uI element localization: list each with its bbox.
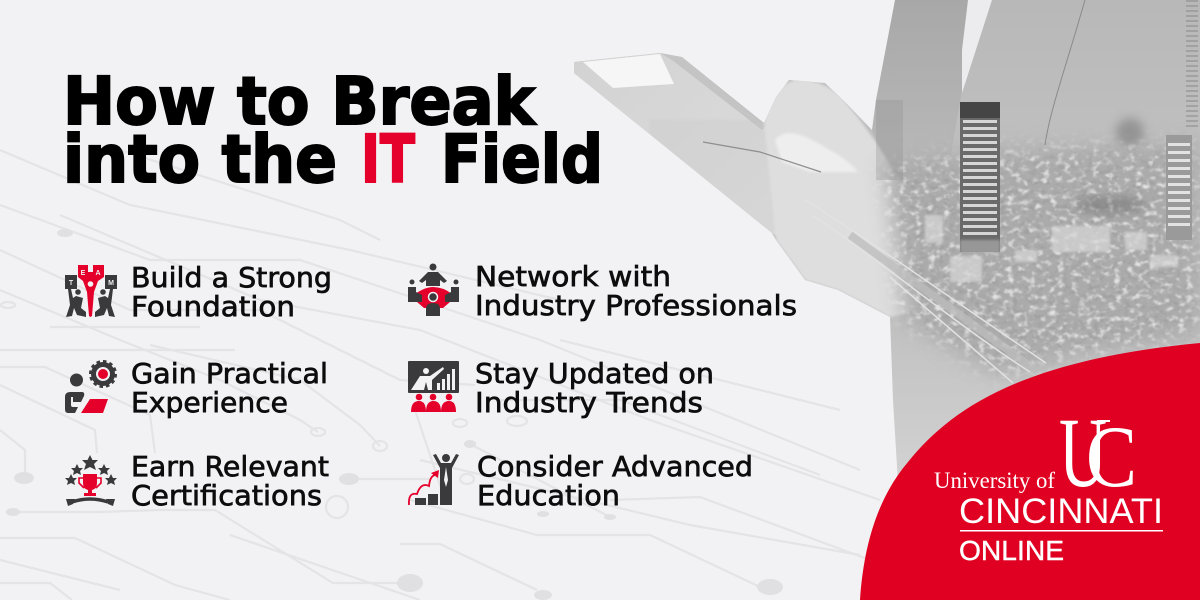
title [63, 63, 603, 198]
item: build a strong foundation [65, 261, 332, 323]
item: network with industry professionals: Industry Professionals [475, 289, 797, 322]
UC monogram: U [1059, 397, 1107, 508]
item: stay updated on industry trends: Industry Trends [475, 386, 703, 419]
tablet rim [660, 53, 766, 130]
ONLINE: ONLINE [959, 535, 1064, 566]
ghost towers [650, 120, 775, 235]
highway [848, 232, 1046, 384]
gap between sleeve and jacket [962, 0, 992, 93]
icon: team holding signs: M [108, 280, 114, 287]
dark tree patches [1075, 118, 1145, 214]
item: consider advanced education [409, 450, 753, 512]
icon: person with laptop and gear [65, 362, 116, 413]
item: gain practical experience [65, 357, 328, 419]
item: earn relevant certifications: Earn Relevant [131, 450, 329, 483]
main tower [960, 102, 1000, 252]
title: into the [63, 121, 337, 198]
item: stay updated on industry trends [408, 357, 714, 419]
city blocks [925, 215, 1178, 282]
edge building dots [1186, 0, 1198, 130]
icon: people around a table [408, 264, 459, 316]
tablet edge shadow under hand [703, 142, 821, 172]
item: consider advanced education: Consider Advanced [477, 450, 753, 483]
red logo panel [860, 343, 1200, 600]
city noise [877, 140, 1200, 378]
item: build a strong foundation: Foundation [131, 290, 295, 323]
item: stay updated on industry trends: Stay Updated on [475, 357, 714, 390]
icon: team holding signs: T [69, 280, 74, 287]
icon: person on steps with arrow [409, 454, 459, 505]
University of: University of [934, 468, 1055, 493]
circuit board pattern [0, 150, 880, 600]
title: Field [441, 121, 603, 198]
title: How to Break [63, 63, 537, 140]
icon: team holding signs: E [81, 270, 86, 277]
icon: team holding signs: A [95, 270, 101, 277]
icon: team holding signs [65, 265, 117, 317]
tablet highlight [583, 54, 674, 88]
jacket [574, 0, 1200, 476]
sleeve tower ghost [876, 100, 903, 180]
item: earn relevant certifications [65, 450, 329, 512]
item: earn relevant certifications: Certifications [131, 479, 322, 512]
item: network with industry professionals [408, 260, 797, 322]
logo: University of Cincinnati Online [934, 397, 1163, 566]
jacket seam [1045, 0, 1085, 145]
tablet [574, 53, 776, 235]
UC monogram: C [1086, 409, 1137, 506]
item: consider advanced education: Education [477, 479, 620, 512]
sleeve [872, 0, 968, 144]
item: gain practical experience: Experience [131, 386, 288, 419]
title: IT [361, 121, 415, 198]
right tower [1166, 135, 1192, 240]
photo: business person holding a tablet with city overlay [574, 0, 1200, 476]
CINCINNATI: CINCINNATI [959, 492, 1163, 531]
item: build a strong foundation: Build a Strong [131, 261, 332, 294]
icon: trophy and stars [65, 455, 117, 506]
icon: presenter with chart and audience [408, 361, 459, 412]
hand [764, 80, 925, 317]
item: gain practical experience: Gain Practical [131, 357, 328, 390]
item: network with industry professionals: Network with [475, 260, 671, 293]
finger light [775, 133, 858, 172]
